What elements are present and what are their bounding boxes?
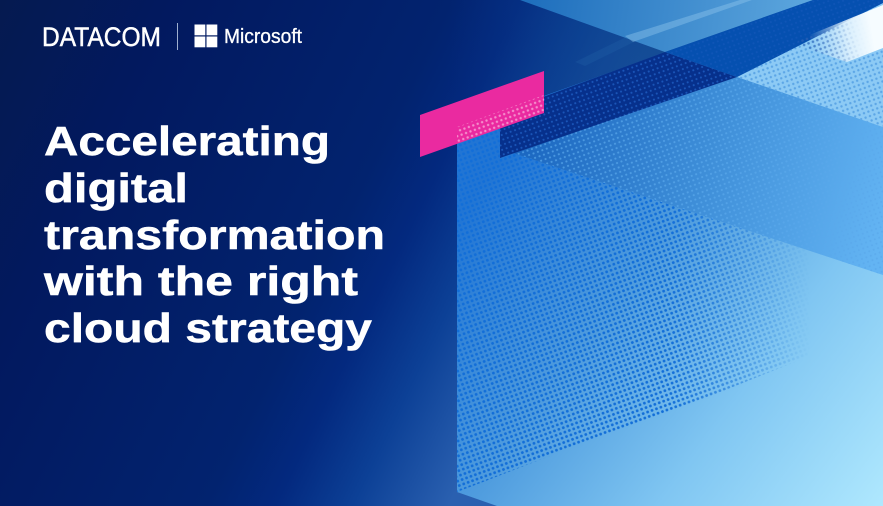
title: cloud strategy <box>44 305 372 351</box>
shape: dark band overlap with dots <box>500 52 737 158</box>
veil: faint translucent band at top <box>400 0 665 122</box>
title <box>43 118 385 351</box>
title: with the right <box>43 258 358 304</box>
icon: Microsoft logo squares <box>194 24 217 47</box>
shape: upper blue triangle <box>520 0 813 52</box>
logo: Datacom: DATACOM <box>42 22 161 52</box>
glare at top right corner <box>797 5 883 62</box>
shape: halftone dots across panel <box>457 130 800 492</box>
shape: royal blue band top right <box>665 0 883 77</box>
shape: mid diagonal band <box>513 77 883 275</box>
shape: right light section with dots <box>737 3 883 127</box>
faint strip on veil <box>575 36 636 66</box>
logo: Microsoft wordmark: Microsoft <box>224 26 302 48</box>
title: digital <box>44 165 188 211</box>
pink accent parallelogram <box>420 71 544 157</box>
divider <box>177 23 178 50</box>
shape: light blue main panel <box>457 0 883 506</box>
title: Accelerating <box>44 118 330 164</box>
title: transformation <box>44 212 385 258</box>
